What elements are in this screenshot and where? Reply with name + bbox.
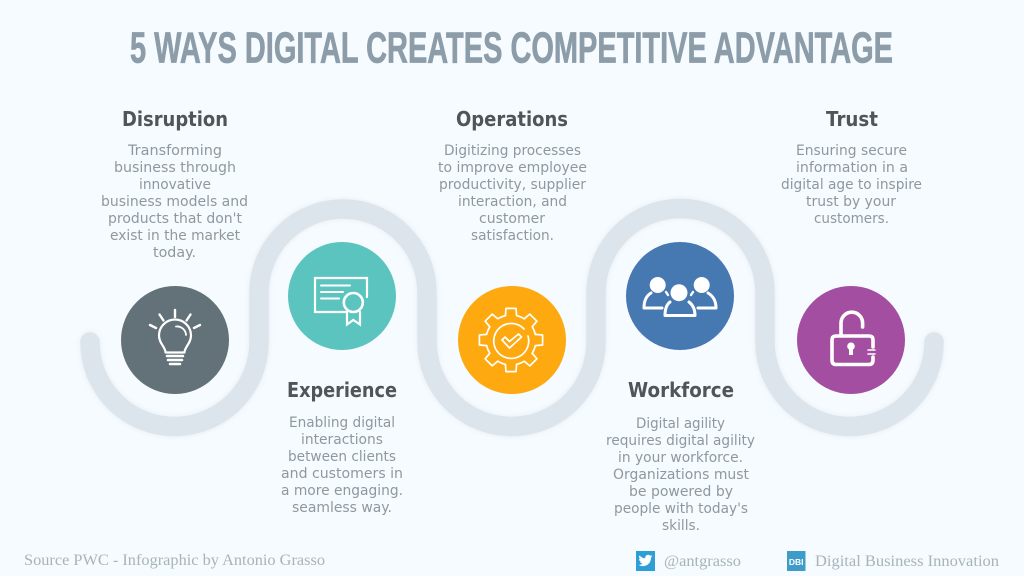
text: workforce description: people with today's (614, 501, 748, 517)
text: disruption description: today. (153, 245, 196, 261)
text: trust description (781, 143, 922, 227)
text: workforce description (606, 416, 755, 534)
icon: light bulb (121, 286, 229, 394)
heading: trust: Trust (826, 107, 878, 131)
icon: DBI logo: DBI (789, 557, 804, 567)
panel: workforce (606, 378, 755, 534)
panel: trust (781, 107, 922, 227)
text: operations description: customer (479, 211, 545, 227)
text: operations description: satisfaction. (471, 228, 554, 244)
text: workforce description: Digital agility (636, 416, 725, 432)
text: trust description: trust by your (806, 194, 896, 210)
twitter handle: @antgrasso (664, 553, 741, 570)
heading: disruption: Disruption (122, 107, 228, 131)
text: disruption description (101, 143, 248, 261)
text: experience description: a more engaging. (281, 483, 403, 499)
heading: workforce: Workforce (628, 378, 734, 402)
text: operations description: productivity, supplier (439, 177, 586, 193)
text: experience description (281, 415, 403, 516)
text: trust description: Ensuring secure (796, 143, 907, 159)
text: experience description: Enabling digital (289, 415, 395, 431)
text: workforce description: Organizations must (613, 467, 749, 483)
text: disruption description: Transforming (127, 143, 222, 159)
text: disruption description: innovative (139, 177, 211, 193)
icon: DBI logo (787, 551, 806, 571)
text: operations description: Digitizing processes (444, 143, 581, 159)
text: disruption description: business through (114, 160, 236, 176)
text: workforce description: skills. (662, 518, 700, 534)
text: operations description (438, 143, 587, 244)
brand name: Digital Business Innovation (815, 553, 999, 570)
text: disruption description: business models and (101, 194, 248, 210)
text: operations description: interaction, and (458, 194, 567, 210)
panel: experience (281, 378, 403, 516)
icon: certificate (288, 242, 396, 350)
source credit: Source PWC - Infographic by Antonio Grasso (24, 552, 325, 569)
text: workforce description: be powered by (629, 484, 733, 500)
text: experience description: and customers in (281, 466, 403, 482)
winding path (90, 209, 934, 427)
icon: twitter (636, 551, 655, 571)
text: workforce description: requires digital agility (606, 433, 755, 449)
panel: operations (438, 107, 587, 244)
heading: operations: Operations (456, 107, 568, 131)
text: trust description: digital age to inspire (781, 177, 922, 193)
text: experience description: between clients (288, 449, 396, 465)
icon: open padlock (797, 286, 905, 394)
text: operations description: to improve employee (438, 160, 587, 176)
icon: team of people (626, 242, 734, 350)
heading: experience: Experience (287, 378, 397, 402)
text: trust description: customers. (814, 211, 889, 227)
text: trust description: information in a (796, 160, 908, 176)
text: workforce description: in your workforce. (618, 450, 743, 466)
icon: gear with check (458, 286, 566, 394)
text: experience description: seamless way. (292, 500, 392, 516)
text: disruption description: products that don't (108, 211, 242, 227)
text: experience description: interactions (301, 432, 383, 448)
text: disruption description: exist in the market (110, 228, 240, 244)
panel: disruption (101, 107, 248, 261)
